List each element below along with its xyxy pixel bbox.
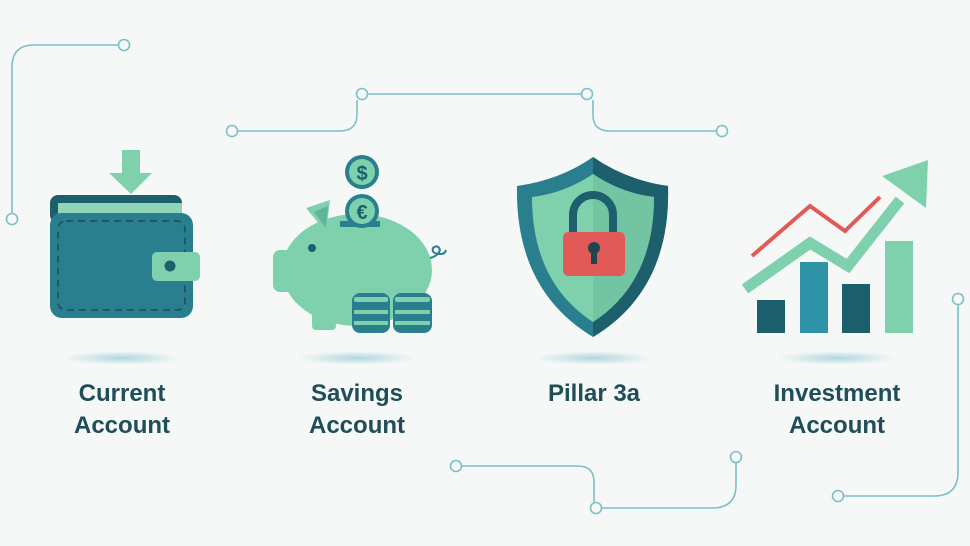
icon: shield with lock [517,157,668,337]
label: Pillar 3a: Pillar 3a [548,380,641,407]
label: Current Account: Account [74,412,170,439]
icon: wallet [50,150,200,318]
icon: piggy bank: $ [356,163,368,185]
label: Current Account: Current [79,380,165,407]
label: Investment Account: Account [789,412,885,439]
icon: growth chart [745,160,928,333]
icon: piggy bank: € [356,202,368,224]
shadows [62,351,897,365]
icon: piggy bank [273,155,446,333]
label: Savings Account: Savings [311,380,403,407]
label: Savings Account: Account [309,412,405,439]
label: Investment Account: Investment [774,380,900,407]
